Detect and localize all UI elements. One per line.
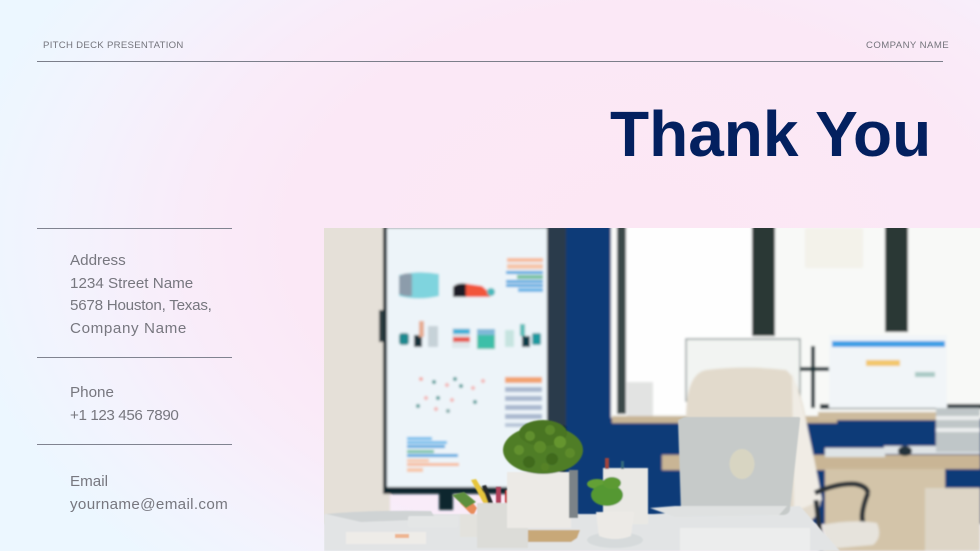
text block: phone: Phone	[70, 384, 114, 401]
text block: email	[70, 473, 228, 512]
text block: email: Email	[70, 473, 108, 490]
text block: phone	[70, 384, 178, 424]
title: Thank You	[610, 98, 931, 170]
office chair	[686, 368, 879, 550]
laptop	[650, 417, 800, 517]
potted plant	[503, 420, 583, 542]
wall screen	[379, 226, 566, 510]
wall	[320, 224, 390, 524]
small plant in mug	[587, 477, 643, 548]
front desk	[324, 506, 840, 551]
white cup and pens right	[603, 458, 648, 524]
text block: address: 5678 Houston, Texas,	[70, 297, 212, 314]
window	[611, 224, 980, 423]
blue wall	[560, 224, 980, 524]
text block: address: 1234 Street Name	[70, 274, 193, 292]
back desk	[662, 408, 980, 551]
photo: office desk with wall screen and monitors	[324, 228, 980, 551]
text block: phone: +1 123 456 7890	[70, 406, 178, 424]
text block: email: yourname@email.com	[70, 496, 228, 512]
pencil cup and pens	[452, 479, 528, 548]
back monitors	[686, 335, 947, 408]
text block: address: Company Name	[70, 320, 187, 336]
header label: pitch deck presentation: PITCH DECK PRESENTATION	[43, 40, 184, 50]
text block: address: Address	[70, 252, 126, 269]
header label: company name: COMPANY NAME	[866, 40, 949, 50]
text block: address	[70, 252, 212, 336]
